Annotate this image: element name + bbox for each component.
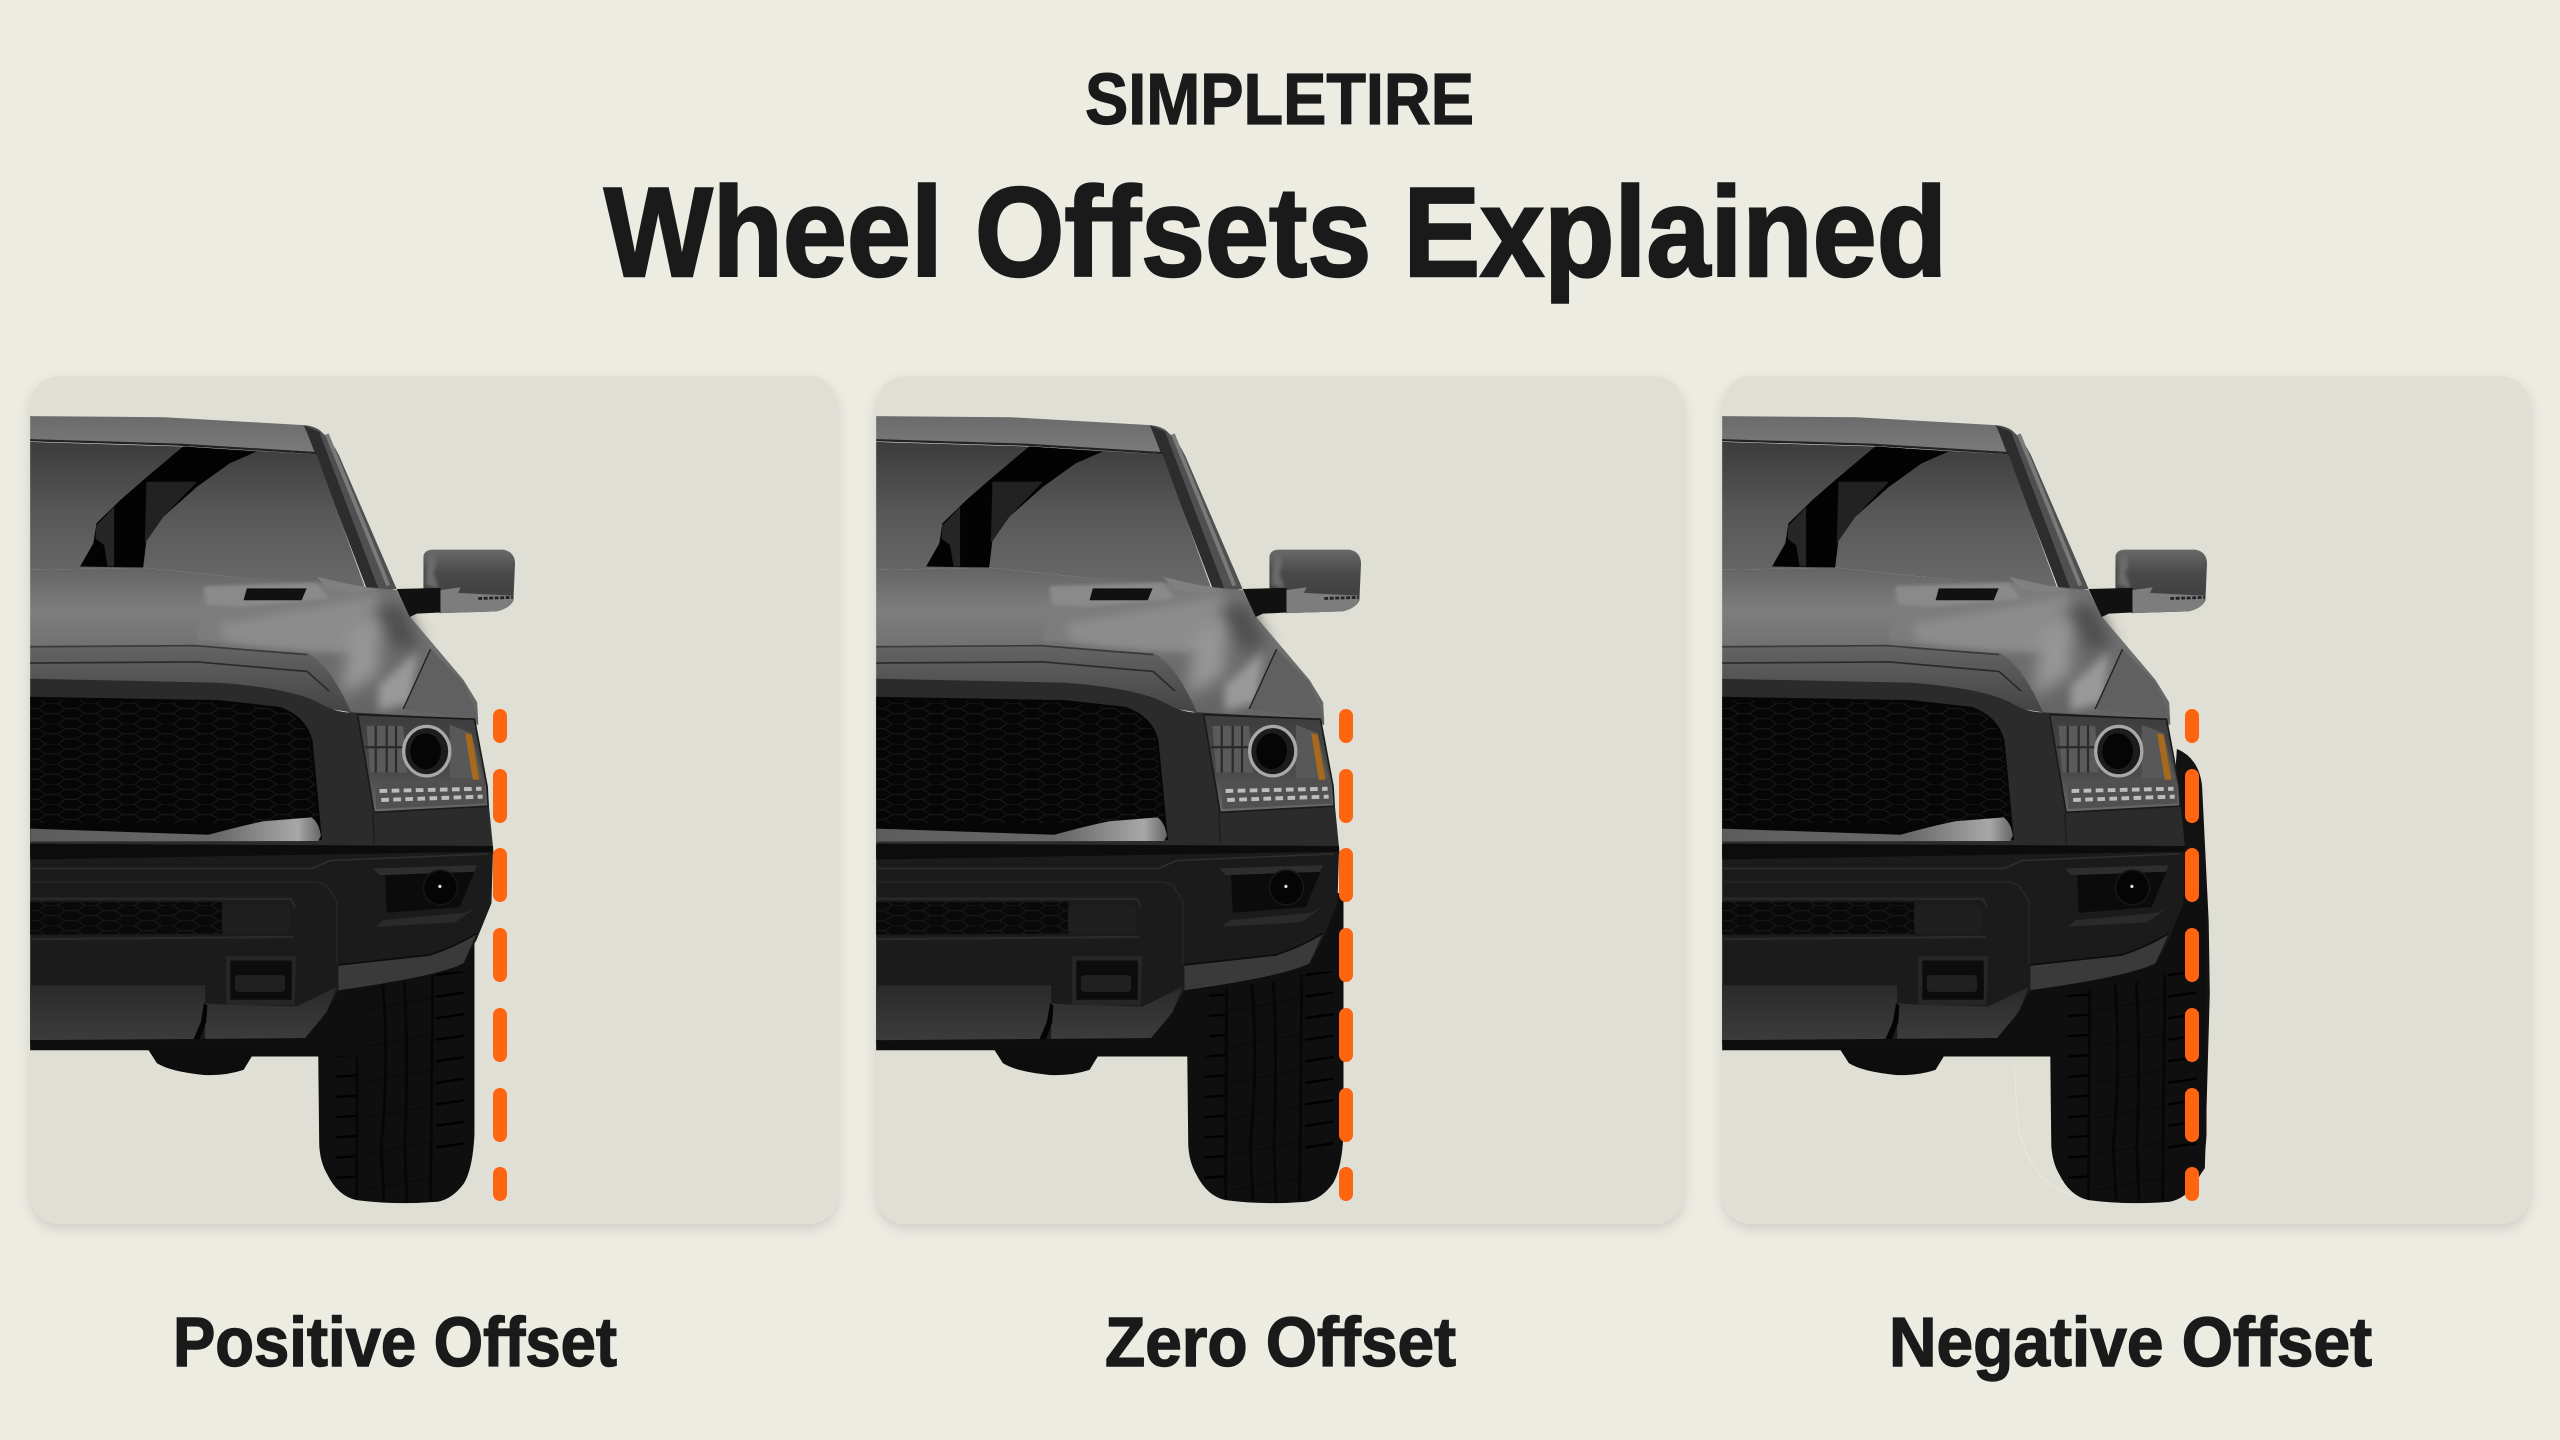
card background — [876, 376, 1684, 1224]
offset guide line — [1339, 709, 1353, 1201]
label: negative offset: Negative Offset — [1889, 1303, 2372, 1381]
label: zero offset: Zero Offset — [1105, 1303, 1456, 1381]
panel: positive offset — [30, 376, 838, 1224]
offset guide line — [493, 709, 507, 1201]
brand logo: SIMPLETIRE: SIMPLETIRE — [1085, 60, 1474, 140]
label: positive offset: Positive Offset — [173, 1303, 617, 1381]
truck with tire protruding — [1722, 416, 2210, 1203]
card background — [30, 376, 838, 1224]
panel: negative offset — [1722, 376, 2530, 1224]
title: Wheel Offsets Explained — [604, 161, 1947, 303]
panel: zero offset — [876, 376, 1684, 1224]
truck with tire flush — [876, 416, 1361, 1203]
truck with tire inset — [30, 416, 515, 1203]
card background — [1722, 376, 2530, 1224]
offset guide line — [2185, 709, 2199, 1201]
